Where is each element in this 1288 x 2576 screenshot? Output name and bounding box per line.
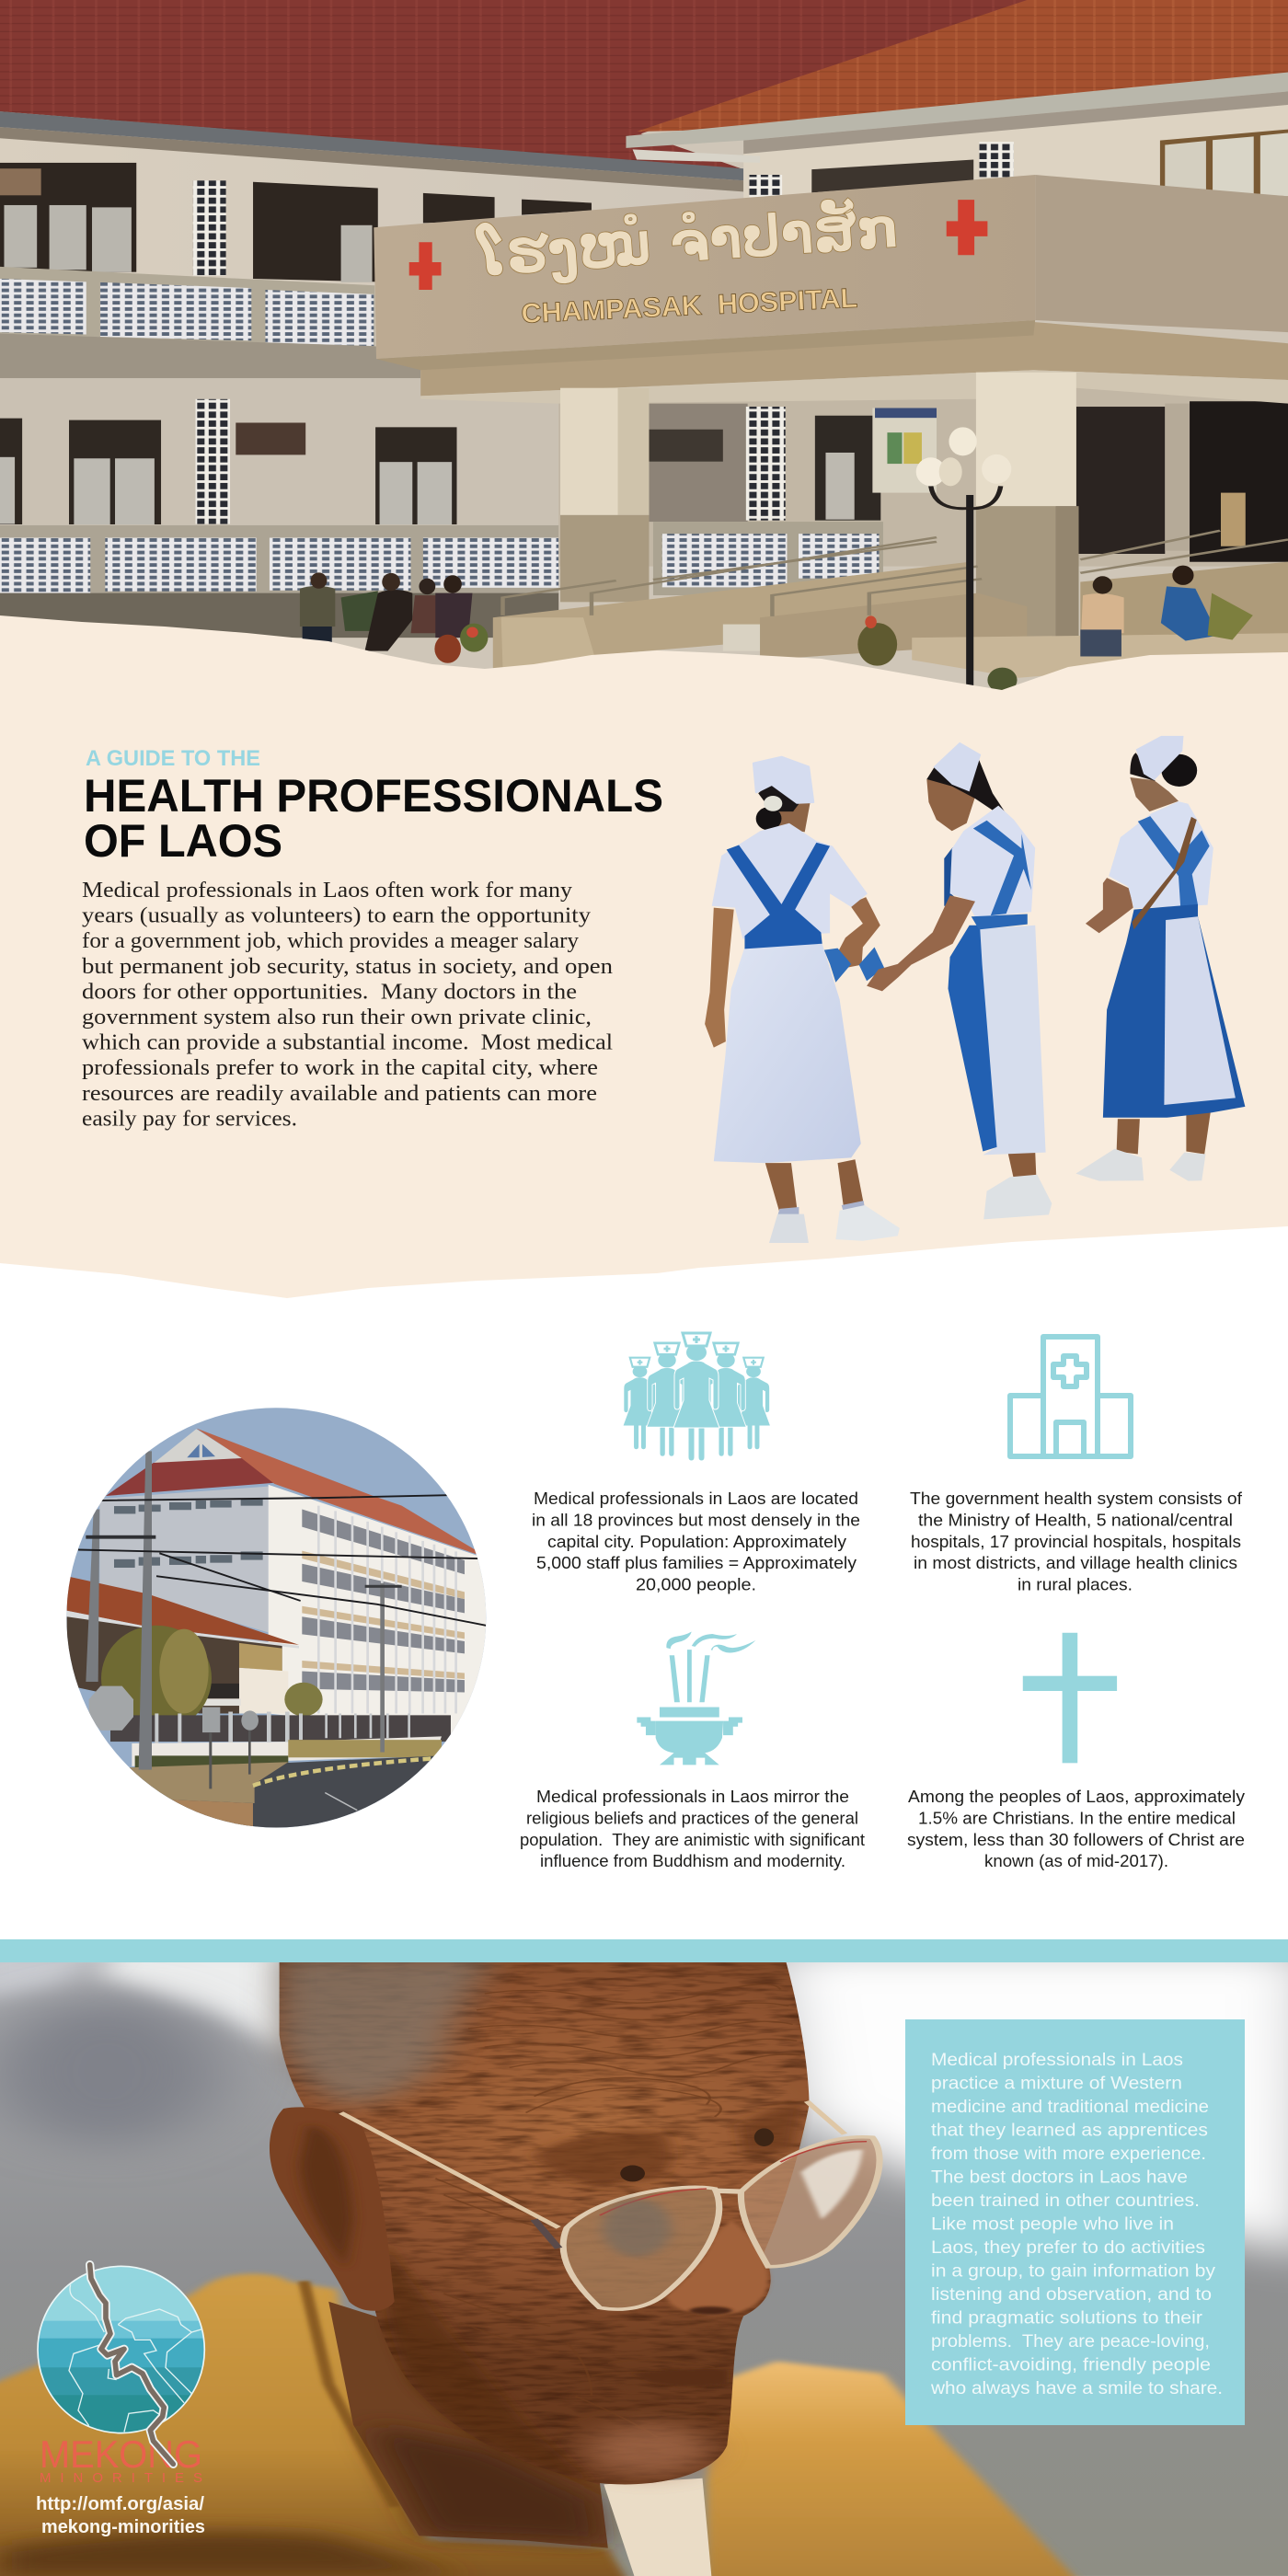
robe right (707, 2361, 1087, 2576)
ear (270, 2107, 395, 2311)
mouth shadow (633, 2369, 727, 2386)
red crosses (409, 242, 442, 290)
icon: incense burner (637, 1632, 755, 1765)
text: government health system: the Ministry of Health, 5 national/central (918, 1511, 1233, 1529)
long orange roof (196, 1428, 477, 1554)
logo sub-wordmark: MINORITIES (40, 2470, 202, 2486)
panel: cream intro section with torn edges (0, 615, 1288, 1298)
main red roof (0, 0, 1035, 169)
title: OF LAOS (84, 815, 282, 867)
intro paragraph: professionals prefer to work in the capital city, where (82, 1056, 598, 1080)
icon: cross (1023, 1633, 1117, 1763)
text: provinces and population: Medical professionals in Laos are located (534, 1489, 858, 1508)
upper windows left wing (0, 163, 592, 282)
front low building roof (67, 1576, 299, 1645)
text: mixture of medicine: problems. They are peace-loving, (931, 2332, 1210, 2352)
right gutter (626, 73, 1288, 148)
utility poles and wires (139, 1451, 152, 1770)
intro paragraph: which can provide a substantial income. Most medical (82, 1031, 613, 1055)
ramps and stairs (493, 562, 970, 669)
ventilation column lower (196, 399, 230, 524)
overline: a guide to the: A GUIDE TO THE (86, 746, 260, 771)
hospital sign: Lao name: ໂຮງໝໍ ຈຳປາສັກ (474, 193, 902, 290)
lower windows (0, 419, 457, 524)
outer nurse left (624, 1358, 656, 1449)
text: provinces and population: capital city. Population: Approximately (547, 1533, 846, 1551)
text: mixture of medicine: Like most people who live in (931, 2215, 1174, 2234)
website address: http://omf.org/asia/ (36, 2494, 204, 2514)
illustration: three nurses (705, 736, 1245, 1243)
nurse middle (867, 742, 1052, 1219)
lower wall (0, 378, 567, 527)
head (280, 1957, 810, 2484)
white collar strip (604, 2478, 711, 2576)
column stripes (317, 1506, 457, 1713)
grey stubble on skull (280, 1957, 493, 2104)
text: mixture of medicine: been trained in other countries. (931, 2191, 1200, 2211)
text: mixture of medicine: from those with more experience. (931, 2145, 1206, 2164)
road signs (89, 1686, 133, 1731)
text: mixture of medicine: that they learned as apprentices (931, 2122, 1208, 2140)
text: mixture of medicine: find pragmatic solutions to their (931, 2309, 1203, 2328)
gable wall (154, 1429, 242, 1464)
teal divider band (0, 1939, 1288, 1962)
text: mixture of medicine: listening and observation, and to (931, 2285, 1212, 2305)
text: Christians: known (as of mid-2017). (984, 1852, 1168, 1870)
text: mixture of medicine: practice a mixture of Western (931, 2074, 1182, 2094)
icon: group of nurses (624, 1333, 770, 1461)
seated people right (857, 566, 1253, 693)
text: government health system: The government health system consists of (910, 1489, 1243, 1508)
text: provinces and population: in all 18 provinces but most densely in the (532, 1511, 860, 1529)
sign soffit band (420, 322, 1288, 396)
concrete band (0, 334, 420, 390)
text: mixture of medicine (930, 2051, 1223, 2398)
hospital photograph (0, 0, 1288, 699)
intro paragraph: for a government job, which provides a meager salary (82, 929, 579, 953)
text: government health system (910, 1489, 1243, 1593)
robe left (0, 2274, 633, 2576)
title: HEALTH PROFESSIONALS (84, 770, 663, 822)
text: provinces and population (532, 1489, 860, 1593)
panel: teal text box (905, 2019, 1245, 2425)
sign side (1035, 175, 1288, 332)
intro paragraph (82, 879, 613, 1131)
text: mixture of medicine: who always have a smile to share. (930, 2379, 1223, 2398)
text: mixture of medicine: in a group, to gain information by (931, 2261, 1216, 2282)
text: Christians: Among the peoples of Laos, approximately (908, 1788, 1245, 1806)
logo wordmark: MEKONG (40, 2432, 202, 2476)
pillar two (976, 373, 1076, 509)
lattice bands (302, 1551, 465, 1679)
logo river line (90, 2265, 173, 2464)
title (84, 770, 663, 867)
text: mixture of medicine: medicine and traditional medicine (931, 2098, 1209, 2117)
robe folds (304, 2281, 395, 2507)
nurse right (1075, 736, 1245, 1181)
text: religious beliefs: influence from Buddhism and modernity. (540, 1852, 845, 1870)
text: religious beliefs: religious beliefs and practices of the general (526, 1809, 858, 1827)
jaw shadow (383, 2244, 592, 2482)
right roof (637, 0, 1288, 132)
bright sky right (764, 1949, 1288, 2260)
dark red front roof (106, 1458, 274, 1496)
logo: Mekong Minorities (37, 2265, 205, 2486)
grey gutter left wing (0, 111, 743, 180)
icon: hospital building (1010, 1337, 1131, 1456)
long facade (269, 1485, 486, 1738)
logo globe (37, 2265, 205, 2435)
low building wall (67, 1616, 282, 1713)
photo: elderly monk (0, 1949, 1288, 2576)
lamp post (916, 427, 1011, 686)
photo: hospital building in circle (64, 1404, 490, 1834)
light haze top left (86, 1962, 282, 2055)
upper wall left wing (0, 127, 743, 285)
text: provinces and population: 5,000 staff plus families = Approximately (536, 1554, 857, 1572)
centre nurse (673, 1333, 719, 1461)
text: religious beliefs: Medical professionals in Laos mirror the (536, 1788, 849, 1806)
base of wall (0, 593, 558, 638)
text: mixture of medicine: Laos, they prefer to do activities (931, 2238, 1205, 2258)
text: religious beliefs (520, 1788, 865, 1870)
outer nurse right (737, 1358, 770, 1449)
glasses (341, 2101, 880, 2309)
interior behind pillars (558, 379, 1288, 567)
text: Christians (907, 1788, 1245, 1870)
text: Christians: 1.5% are Christians. In the entire medical (918, 1809, 1236, 1827)
inner balcony rail (653, 522, 883, 595)
website address (36, 2494, 205, 2537)
intro paragraph: years (usually as volunteers) to earn the opportunity (82, 904, 591, 928)
nose (665, 2219, 768, 2316)
text: Christians: system, less than 30 followers of Christ are (907, 1831, 1245, 1849)
intro paragraph: doors for other opportunities. Many doctors in the (82, 980, 577, 1004)
seated people group (300, 572, 488, 663)
intro paragraph: government system also run their own private clinic, (82, 1006, 592, 1029)
right wing upper (743, 100, 1288, 205)
text: provinces and population: 20,000 people. (636, 1575, 756, 1593)
intro paragraph: Medical professionals in Laos often work for many (82, 879, 572, 903)
pillar one (560, 388, 649, 517)
intro paragraph: easily pay for services. (82, 1107, 297, 1131)
text: religious beliefs: population. They are animistic with significant (520, 1831, 865, 1849)
website address: mekong-minorities (41, 2517, 205, 2537)
fence (110, 1715, 451, 1742)
text: government health system: hospitals, 17 provincial hospitals, hospitals (911, 1533, 1241, 1551)
text: mixture of medicine: conflict-avoiding, friendly people (931, 2355, 1211, 2375)
text: government health system: in rural places. (1018, 1575, 1133, 1593)
ground and road (130, 1755, 434, 1827)
end elevation (99, 1487, 269, 1632)
tree left (101, 1625, 212, 1715)
chin highlight (587, 2422, 710, 2476)
hospital sign: English name: CHAMPASAK HOSPITAL (521, 283, 858, 329)
lens glare (801, 2150, 863, 2219)
text: government health system: in most districts, and village health clinics (914, 1554, 1237, 1572)
hedge (134, 1755, 289, 1767)
ventilation column upper (193, 180, 226, 276)
text: mixture of medicine: The best doctors in Laos have (931, 2168, 1188, 2188)
nurse left (705, 757, 900, 1243)
sign front (374, 175, 1035, 359)
handrails (503, 531, 1288, 616)
neck (328, 2302, 608, 2548)
intro paragraph: but permanent job security, status in society, and open (82, 955, 613, 979)
forehead wrinkles (427, 1984, 801, 2437)
text: mixture of medicine: Medical professionals in Laos (931, 2051, 1183, 2070)
middle nurse right (706, 1343, 746, 1456)
lower balcony rail (0, 525, 558, 594)
intro paragraph: resources are readily available and patients can more (82, 1082, 597, 1106)
brow and eye shadow (534, 2132, 672, 2187)
right wing windows (749, 175, 782, 197)
eyes (620, 2166, 645, 2181)
middle nurse left (647, 1343, 687, 1456)
upper balcony rail (0, 267, 374, 347)
